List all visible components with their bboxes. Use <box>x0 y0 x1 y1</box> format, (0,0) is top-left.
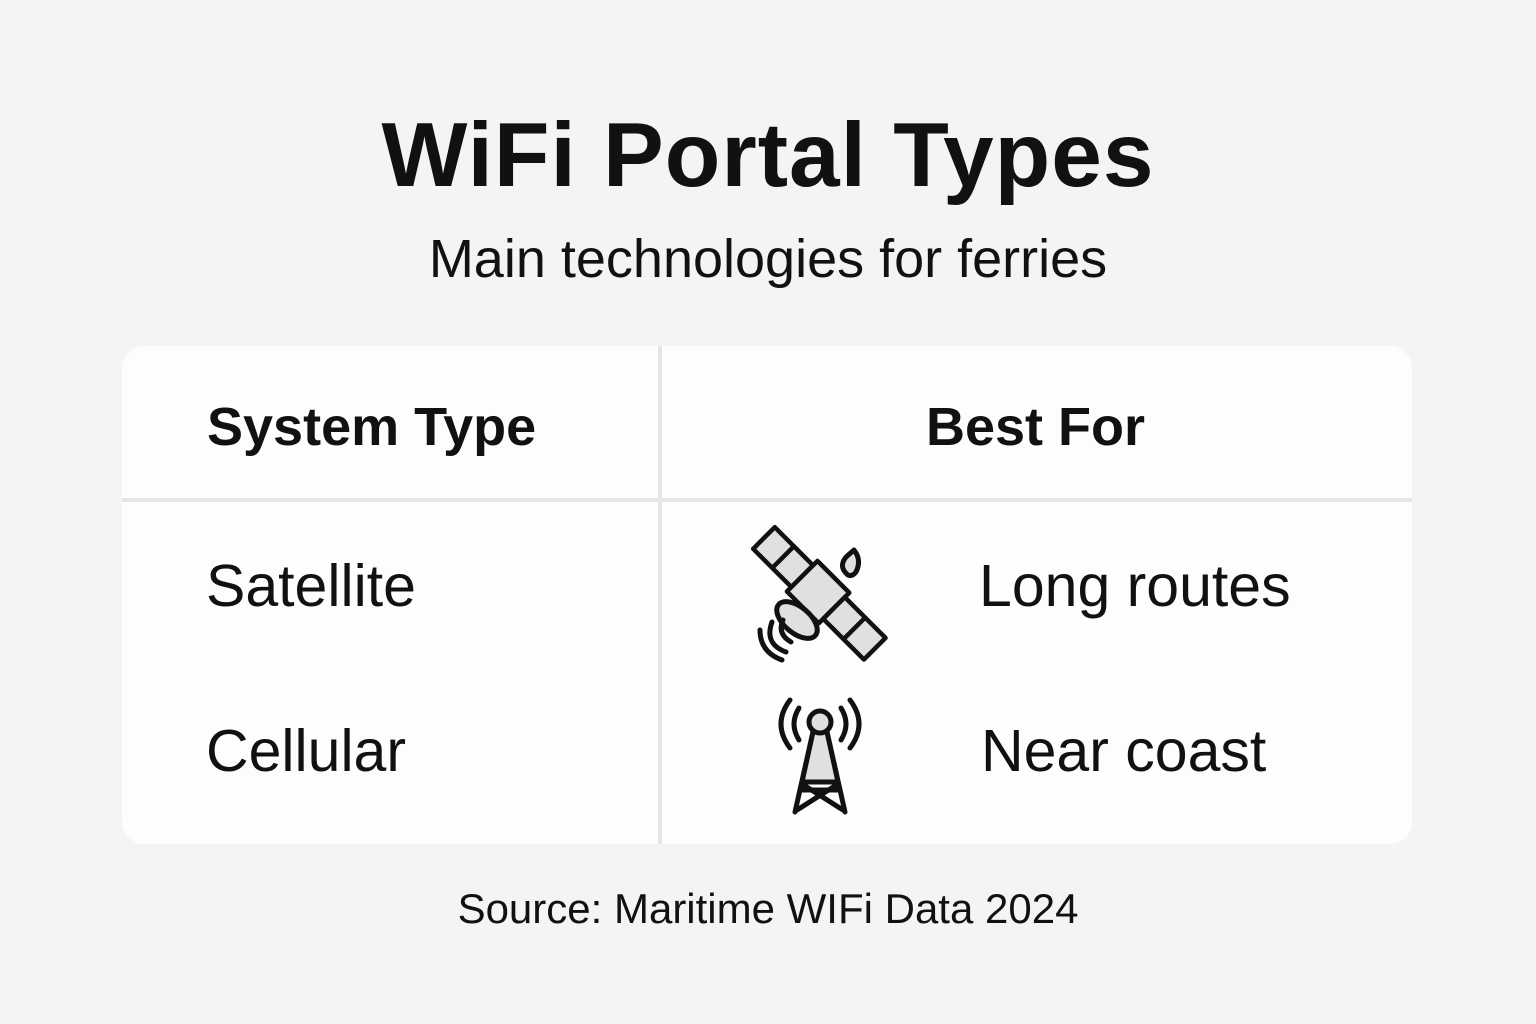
row label: satellite: Satellite <box>206 553 416 619</box>
title: WiFi Portal Types <box>382 105 1154 206</box>
subtitle: Main technologies for ferries <box>429 229 1107 289</box>
panel: table <box>122 346 1412 844</box>
source note: Source: Maritime WIFi Data 2024 <box>458 885 1078 932</box>
text: near coast: Near coast <box>981 718 1266 784</box>
header: best for: Best For <box>926 397 1145 457</box>
text: long routes: Long routes <box>979 553 1291 619</box>
row label: cellular: Cellular <box>206 718 406 784</box>
header: system type: System Type <box>207 397 536 457</box>
